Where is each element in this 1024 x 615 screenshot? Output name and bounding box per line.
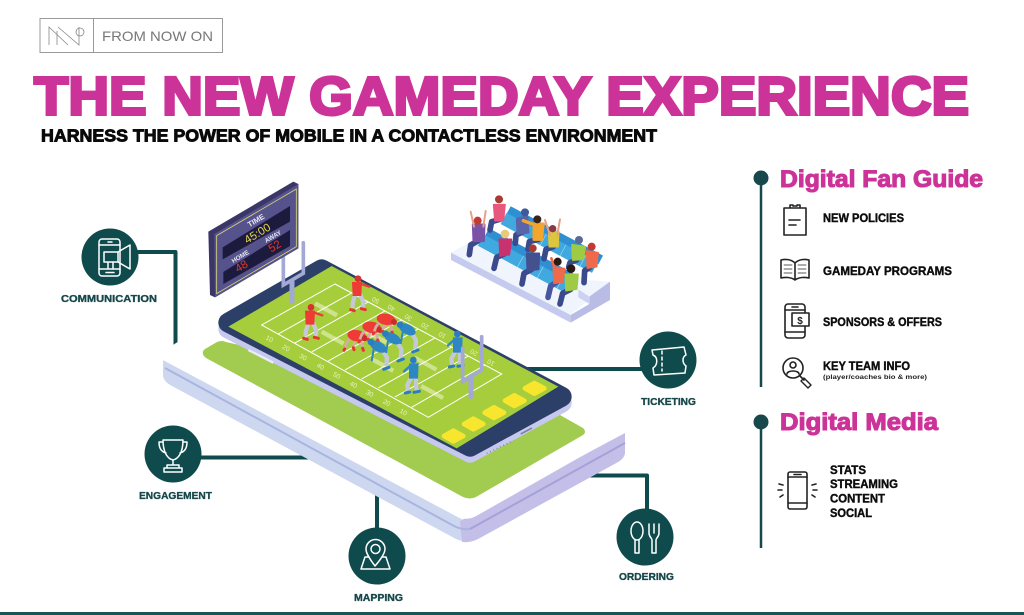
node: mapping: MAPPING bbox=[354, 592, 403, 604]
timeline bbox=[754, 170, 768, 387]
item: key team info: KEY TEAM INFO bbox=[823, 361, 910, 373]
icon: spoon and fork bbox=[631, 522, 659, 553]
scoreboard: AWAY bbox=[264, 229, 283, 245]
footer bar bbox=[0, 612, 1024, 615]
logo: From Now On: FROM NOW ON bbox=[102, 28, 213, 44]
field screen: 10 bbox=[437, 330, 448, 340]
scoreboard: 48 bbox=[233, 258, 250, 275]
node: ticketing: TICKETING bbox=[641, 396, 696, 408]
field screen bbox=[228, 266, 558, 448]
subtitle: HARNESS THE POWER OF MOBILE IN A CONTACTLESS ENVIRONMENT bbox=[41, 126, 657, 146]
list: stats streaming content social: SOCIAL bbox=[830, 508, 872, 520]
node: engagement: ENGAGEMENT bbox=[139, 490, 213, 502]
field screen: 10 bbox=[264, 334, 274, 344]
title: THE NEW GAMEDAY EXPERIENCE bbox=[34, 66, 969, 126]
item: gameday programs: GAMEDAY PROGRAMS bbox=[823, 266, 952, 278]
node: communication: COMMUNICATION bbox=[61, 293, 157, 305]
isometric platform bbox=[163, 265, 626, 542]
field screen: 20 bbox=[420, 320, 430, 330]
field screen: 30 bbox=[403, 312, 414, 322]
players bbox=[304, 275, 463, 393]
list: stats streaming content social: STREAMING bbox=[830, 479, 898, 491]
item: new policies bbox=[784, 205, 904, 235]
connector lines bbox=[136, 252, 647, 530]
panel: digital fan guide bbox=[754, 166, 983, 388]
item: key team info bbox=[783, 358, 927, 388]
list: stats streaming content social bbox=[830, 465, 898, 520]
icon: phone with megaphone bbox=[99, 239, 130, 276]
left goal post bbox=[283, 243, 303, 302]
logo: From Now On bbox=[40, 18, 222, 52]
icon: trophy bbox=[159, 440, 187, 472]
field screen: 40 bbox=[348, 380, 358, 390]
item: sponsors and offers: SPONSORS & OFFERS bbox=[823, 317, 942, 329]
scoreboard: TIME bbox=[246, 212, 266, 229]
right goal post bbox=[463, 337, 482, 397]
fans in stands bbox=[451, 195, 610, 323]
seated people bbox=[469, 195, 598, 304]
item: key team info: (player/coaches bio & more) bbox=[823, 374, 927, 381]
field screen: 40 bbox=[386, 302, 397, 312]
phone body bbox=[228, 269, 562, 453]
scoreboard bbox=[208, 182, 298, 297]
node: ordering bbox=[616, 508, 674, 583]
scoreboard: 45:00 bbox=[243, 222, 273, 247]
field screen: 10 bbox=[398, 408, 408, 418]
field screen: 40 bbox=[315, 362, 325, 372]
icon: phone with signal bbox=[778, 472, 817, 509]
field screen: 30 bbox=[298, 353, 308, 363]
heading: digital media: Digital Media bbox=[780, 409, 939, 436]
field screen: 20 bbox=[469, 347, 479, 357]
item: gameday programs bbox=[781, 259, 952, 280]
item: sponsors and offers: $ bbox=[797, 316, 803, 327]
icon: ticket bbox=[652, 347, 686, 375]
item: sponsors and offers bbox=[785, 304, 942, 338]
node: communication bbox=[61, 228, 157, 305]
panel: digital media bbox=[754, 409, 939, 548]
field screen: 50 bbox=[371, 295, 381, 305]
scoreboard: 52 bbox=[267, 238, 284, 255]
blue seats bbox=[481, 211, 601, 288]
item: new policies: NEW POLICIES bbox=[823, 213, 904, 225]
field screen: 20 bbox=[381, 398, 392, 408]
list: stats streaming content social: STATS bbox=[830, 465, 866, 477]
yellow app buttons bbox=[444, 383, 544, 441]
bleachers bbox=[451, 237, 610, 323]
node: ordering: ORDERING bbox=[619, 571, 674, 583]
phone with football field bbox=[208, 182, 562, 453]
field screen: 20 bbox=[281, 344, 291, 354]
timeline bbox=[754, 414, 768, 548]
field screen: 10 bbox=[486, 357, 496, 367]
field screen: 50 bbox=[331, 371, 342, 381]
icon: map pin bbox=[361, 540, 390, 569]
node: engagement bbox=[139, 426, 213, 502]
scoreboard: HOME bbox=[231, 249, 251, 265]
list: stats streaming content social: CONTENT bbox=[830, 494, 885, 506]
node: ticketing bbox=[640, 332, 696, 408]
heading: digital fan guide: Digital Fan Guide bbox=[780, 166, 983, 193]
field screen: 30 bbox=[364, 389, 375, 399]
node: mapping bbox=[348, 528, 406, 604]
